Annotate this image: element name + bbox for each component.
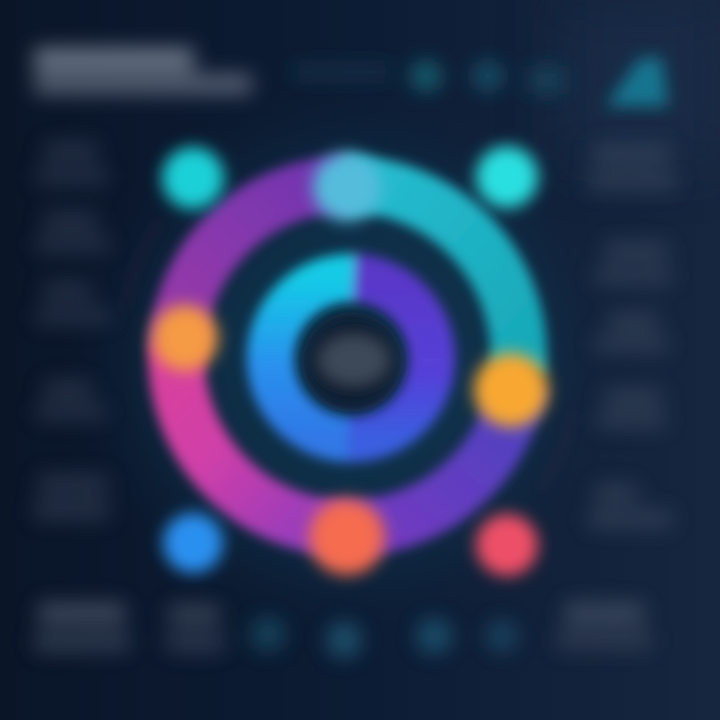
node: bottom left blue [163, 513, 223, 573]
icon: top right badge [606, 58, 668, 106]
chart: inner donut ring [271, 278, 431, 438]
node: top right cyan [476, 146, 538, 208]
right column text [588, 144, 676, 528]
center label [302, 312, 402, 412]
decorative arcs around the ring [124, 220, 574, 490]
chart: outer donut ring [176, 184, 519, 528]
bottom row [34, 602, 652, 658]
segment: teal [348, 184, 519, 372]
left column text [34, 142, 110, 520]
node: right amber [474, 353, 548, 427]
header icons row [292, 61, 564, 94]
segment: indigo [348, 384, 518, 528]
segment: violet [177, 184, 348, 345]
segment: cyan blue [271, 278, 354, 438]
segment: purple [348, 278, 431, 438]
node: top ring light blue [313, 153, 381, 221]
segment: magenta [176, 340, 348, 528]
node: bottom coral [309, 499, 385, 575]
title block [34, 48, 252, 94]
node: bottom right red [476, 514, 538, 576]
node: left orange [152, 305, 218, 371]
node: top left cyan [162, 147, 224, 209]
